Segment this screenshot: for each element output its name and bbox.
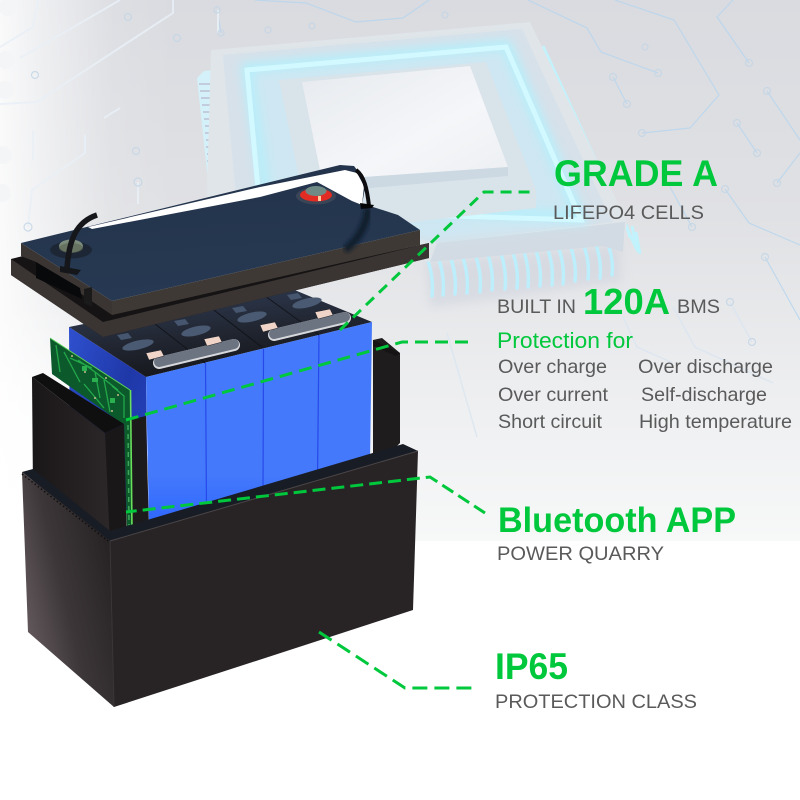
- cell pack left side: [69, 327, 148, 526]
- chip glow ring: [245, 46, 590, 240]
- left strap clip: [60, 266, 81, 275]
- inner case left wall: [32, 373, 127, 550]
- chip outer body: [206, 22, 627, 262]
- left traces: [0, 0, 218, 227]
- left strap: [67, 215, 97, 268]
- leader line: grade A: [340, 192, 532, 330]
- text: bluetooth: Bluetooth APP: [498, 501, 736, 540]
- label squares: [117, 293, 302, 340]
- text: BMS heading: BUILT IN: [497, 297, 576, 318]
- BMS circuit board: [50, 338, 132, 531]
- chip left pins: [197, 70, 232, 190]
- cell dividers: [206, 335, 319, 510]
- positive terminal: [296, 186, 336, 204]
- chip pin shadow: [425, 245, 622, 308]
- text: bluetooth: POWER QUARRY: [497, 544, 664, 565]
- text: protection list: Over discharge: [638, 356, 773, 378]
- leader line: bluetooth: [126, 477, 485, 513]
- text: BMS heading: BMS: [677, 297, 720, 318]
- lid slot: [36, 262, 82, 299]
- text: protection list: Short circuit: [498, 411, 603, 433]
- chip bottom pins: [427, 241, 612, 296]
- case front face: [110, 451, 418, 707]
- text: protection list: Over charge: [498, 356, 607, 378]
- text: protection list: [497, 328, 792, 433]
- terminal pads: [146, 309, 333, 360]
- lithium cell pack: [69, 284, 372, 526]
- circuit traces: [0, 0, 800, 437]
- leader line: BMS: [126, 342, 468, 420]
- case left face: [22, 472, 114, 707]
- cell pack top: [69, 284, 372, 377]
- negative terminal: [50, 240, 92, 258]
- vent ovals: [121, 295, 323, 353]
- inner case right wall: [373, 338, 400, 470]
- text: protection list: Over current: [498, 384, 609, 406]
- white reflection strip: [88, 170, 364, 229]
- leader line: IP65: [319, 632, 478, 688]
- text: protection list: Protection for: [497, 328, 633, 353]
- case rim inner: [22, 444, 418, 541]
- lid top surface: [21, 165, 420, 301]
- text: BMS heading: 120A: [583, 281, 670, 322]
- background panel: [0, 0, 800, 541]
- battery exploded view: [11, 165, 429, 707]
- bus bars: [159, 317, 345, 363]
- processor chip illustration: [197, 22, 640, 308]
- right strap: [356, 170, 369, 206]
- text: protection list: Self-discharge: [641, 384, 767, 406]
- chip right edge glow: [543, 46, 638, 252]
- chip middle tier: [279, 62, 536, 228]
- lid front band: [112, 230, 420, 315]
- text: BMS heading: [497, 281, 720, 322]
- left edge pads: [0, 0, 17, 202]
- chip top square: [302, 66, 508, 180]
- text: protection list: High temperature: [639, 411, 792, 433]
- text: grade A: GRADE A: [554, 153, 718, 194]
- text: IP65: IP65: [495, 646, 568, 687]
- text: IP65: PROTECTION CLASS: [495, 692, 697, 713]
- text: grade A: [553, 153, 718, 224]
- lid left edge: [21, 243, 112, 315]
- dark gap behind board: [128, 416, 149, 536]
- cell top seams: [150, 296, 319, 363]
- lid lower plate: [11, 243, 429, 337]
- battery outer case: [22, 444, 418, 707]
- text: grade A: LIFEPO4 CELLS: [553, 203, 704, 224]
- cell pack front: [146, 322, 372, 526]
- text: IP65: [495, 646, 697, 713]
- text: bluetooth: [497, 501, 736, 565]
- battery lid: [11, 165, 429, 337]
